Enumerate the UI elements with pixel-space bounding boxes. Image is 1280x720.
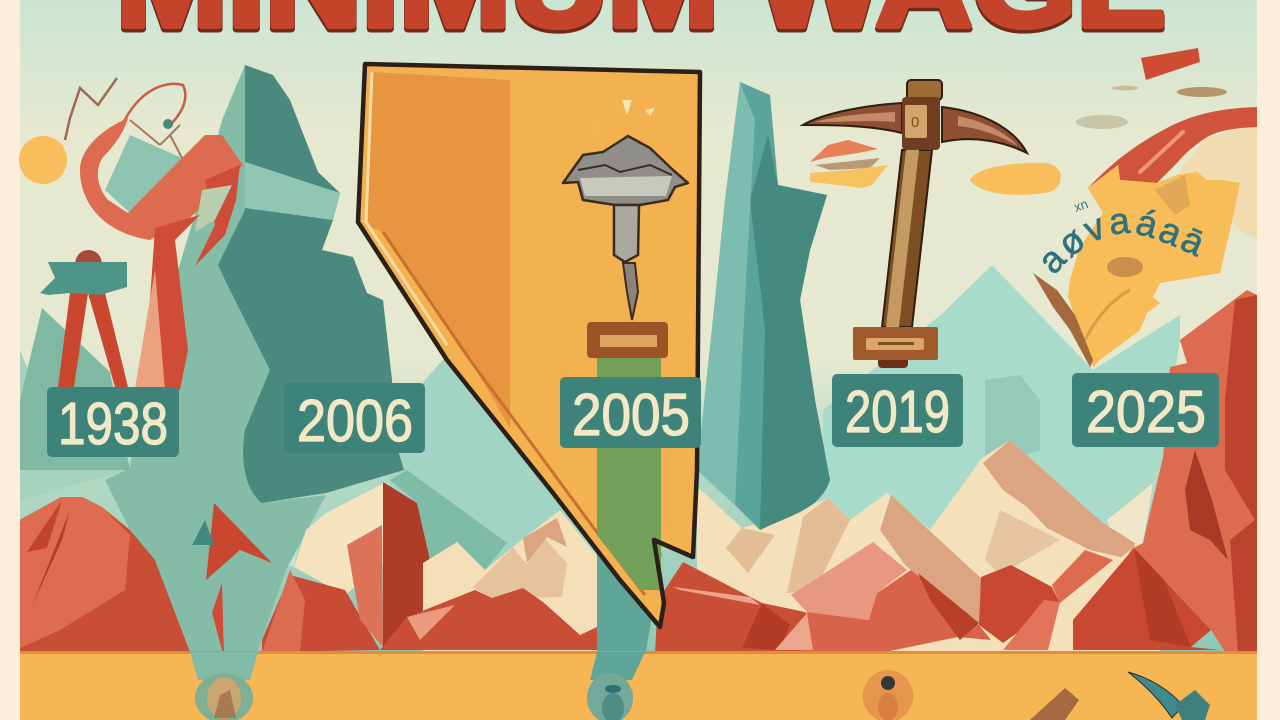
teal box behind ribbon bbox=[105, 135, 182, 213]
red arrow peak bbox=[192, 503, 272, 657]
survey antenna bbox=[118, 84, 185, 158]
tripod surveyor bbox=[40, 250, 128, 387]
year label 2006: 2006 bbox=[297, 388, 413, 454]
right red foothills bbox=[655, 542, 1220, 652]
medallion center bbox=[587, 673, 633, 720]
scribbled lettering: aøvaáaā bbox=[1043, 209, 1202, 273]
year label 1938: 1938 bbox=[58, 391, 168, 457]
right cream and tan range bbox=[697, 440, 1160, 652]
scribbled lettering: xn bbox=[1072, 196, 1090, 215]
small clouds bbox=[1076, 86, 1227, 129]
left teal mountain dark bbox=[218, 65, 404, 503]
pickaxe bbox=[803, 80, 1027, 368]
bottom pickaxe icon bbox=[1128, 672, 1210, 720]
yellow cloud bbox=[970, 163, 1061, 195]
year label 2025: 2025 bbox=[1086, 379, 1206, 445]
nevada map bbox=[358, 64, 700, 627]
orange burst bbox=[1068, 165, 1240, 367]
streak clouds bbox=[810, 140, 888, 188]
red ribbon bbox=[80, 118, 243, 390]
pickaxe: 0 bbox=[911, 114, 919, 131]
red arc bbox=[1088, 107, 1257, 188]
brown rock shard bbox=[1033, 273, 1093, 367]
year label 2005: 2005 bbox=[572, 382, 690, 448]
middle red and cream peak bbox=[262, 482, 430, 652]
red flag bbox=[1141, 48, 1200, 80]
left teal mountain light funnel bbox=[105, 65, 326, 690]
pale teal band bbox=[245, 162, 340, 220]
burst shading bbox=[1085, 175, 1190, 340]
center column tip over ground bbox=[590, 652, 645, 680]
background pale mountains bbox=[20, 265, 1180, 600]
center right teal mountain bbox=[697, 82, 830, 530]
cream peaks center bbox=[380, 510, 600, 652]
medallion left bbox=[195, 673, 253, 720]
right tall red cliff bbox=[1134, 290, 1257, 652]
ground band bbox=[20, 651, 1257, 720]
teal column under map bbox=[590, 553, 662, 690]
left red mountain bbox=[20, 497, 190, 652]
year label 2019: 2019 bbox=[845, 379, 950, 445]
beige wash bbox=[1177, 125, 1257, 240]
drill base bbox=[587, 322, 668, 358]
medallion right bbox=[863, 670, 913, 720]
teal funnel tip over ground bbox=[190, 652, 258, 680]
sun bbox=[19, 136, 67, 184]
drill and ore icon bbox=[563, 100, 688, 320]
wavy wire bbox=[65, 78, 117, 140]
bottom hammer icon bbox=[1030, 688, 1079, 720]
